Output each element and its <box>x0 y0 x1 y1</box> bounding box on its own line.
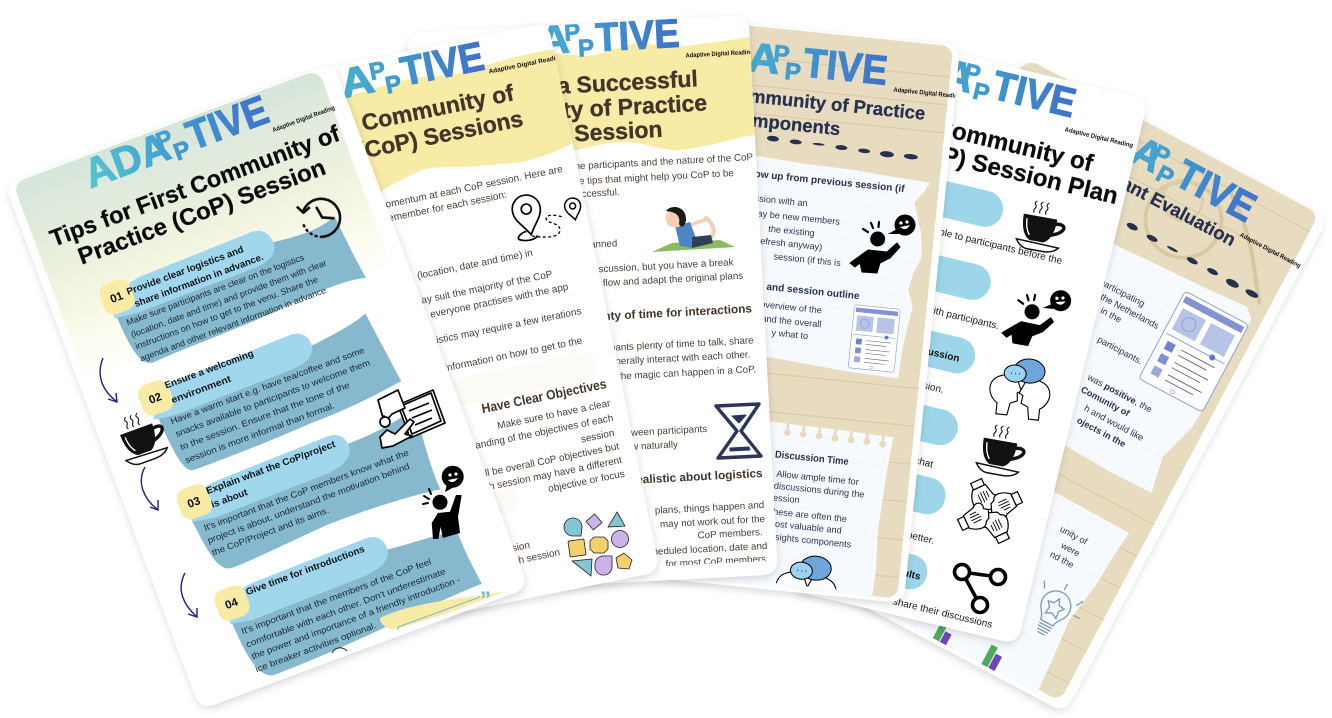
card 3 intro text: some tips that might help you CoP to be <box>560 168 735 188</box>
card 2 objectives text: session <box>496 540 531 558</box>
card 5: session plan <box>796 60 1147 647</box>
step 3 text: discussion. <box>894 374 945 396</box>
tip 2 <box>135 301 405 479</box>
card 3 text: logistics: scheduled location, date and <box>643 541 768 558</box>
tip 3: project is about, understand the motivation behind <box>206 461 411 545</box>
card 4 logo: TIVE <box>801 39 890 94</box>
icon: discussion heads <box>773 552 839 618</box>
card 5 tagline: Adaptive Digital Reading <box>1064 126 1134 149</box>
tip 3: the CoP/Project and its aims. <box>210 505 330 558</box>
card 2 logistics text <box>407 240 588 378</box>
card 3 title: Community of Practice <box>456 89 708 128</box>
card 2 yellow banner <box>326 49 577 212</box>
step pill 4 <box>920 405 958 446</box>
icon: coffee <box>112 407 171 468</box>
card 6 chart bars <box>932 626 1002 671</box>
card 1 logo: P <box>152 125 177 156</box>
tip 4: Give time for introductions <box>244 544 366 598</box>
card 2 title <box>349 79 525 164</box>
card 3: successful community of practice session <box>407 6 781 592</box>
card 1 logo: TIVE <box>180 86 275 159</box>
card 6 tagline: Adaptive Digital Reading <box>1238 232 1302 270</box>
tip 1: 01 <box>109 290 125 306</box>
card 4 title: Community of Practice <box>724 83 926 124</box>
card 2 logistics text: information on how to get to the <box>444 335 584 374</box>
tip 4: ice breaker activities optional. <box>254 620 377 674</box>
card 3 text: planned: flow and adapt the original plans <box>603 271 744 289</box>
tip 2: session is more informal than formal. <box>184 400 336 465</box>
card 2 logistics text: logistics may require a few iterations <box>422 306 582 349</box>
tip 1 <box>96 198 368 372</box>
card 4 section: follow up: may be new members <box>749 208 841 227</box>
card 1 tagline: Adaptive Digital Reading <box>272 104 336 134</box>
card 4 binder holes <box>783 422 887 448</box>
tip 3 <box>174 404 444 578</box>
step 4 text: chat <box>913 455 934 471</box>
tip 3: is about <box>210 487 250 511</box>
card 3 logo: TIVE <box>594 10 681 60</box>
card 4 section: follow up: the existing <box>768 224 815 238</box>
step 5 text: better. <box>906 530 935 547</box>
card 2 objectives text: will be overall CoP objectives but <box>474 441 620 481</box>
icon: clock <box>297 193 345 242</box>
card 4 section: follow up: session (if this is <box>773 251 842 268</box>
card 3 intro text <box>559 152 755 201</box>
card 1 title: Tips for First Community of <box>46 120 343 252</box>
card 6 torn note 1 <box>1065 244 1252 493</box>
card 3 tagline: Adaptive Digital Reading <box>685 49 754 59</box>
card 1 logo: P <box>170 136 195 167</box>
card 4 section: session outline <box>764 284 860 339</box>
card 5 logo: P <box>961 59 983 89</box>
curved arrow 2 <box>141 467 158 510</box>
card 6 text 2: was positive, the <box>1085 372 1154 414</box>
tip 4: 04 <box>224 596 240 612</box>
card 1 logo <box>78 86 275 198</box>
card 4 torn note 2 <box>699 422 894 596</box>
card 6 text 2: Comunity of <box>1079 384 1132 419</box>
card 3 intro text: the participants and the nature of the CoP <box>572 152 754 173</box>
card 3 text: interactions: generally interact with each other. <box>604 349 751 368</box>
card 5 logo: P <box>970 78 992 108</box>
icon: heads <box>987 355 1053 421</box>
tip 4: comfortable with each other. Don't underestimate <box>245 566 447 649</box>
card 4 section: discussion time: most valuable and <box>767 518 842 536</box>
card 1: tips for first community of practice session <box>5 63 528 710</box>
card 6 title: Participant Evaluation <box>1058 140 1240 250</box>
card 3 heading: interactions: Plenty of time for interactions <box>585 301 753 324</box>
card 4 section: session outline: and session outline <box>766 282 860 302</box>
icon: share nodes <box>954 564 1006 612</box>
card 6 text 2: h and would like <box>1083 403 1145 443</box>
card 5 title: (CoP) Session Plan <box>900 132 1121 210</box>
card 4 section: session outline: overview of the <box>760 299 822 315</box>
card 2 title: (CoP) Sessions <box>355 105 525 164</box>
tip 4: the power and importance of a friendly introduction - <box>250 574 462 661</box>
curved arrow 1 <box>100 358 117 402</box>
step pill 1 <box>942 181 1004 227</box>
card 2 objectives text: session <box>580 428 615 446</box>
card 2 objectives text: understanding of the objectives of each <box>442 413 614 458</box>
card 3 title: a Successful <box>557 65 698 99</box>
card 3 logo: P <box>564 19 581 47</box>
card 5 logo: TIVE <box>988 62 1080 126</box>
card 4 paper background <box>748 26 952 598</box>
card 2 objectives text: each session <box>502 547 561 570</box>
icon: tablet <box>848 305 900 372</box>
step pill 3: Discussion <box>906 342 961 365</box>
tip 2: to the session. Ensure that the tone of the <box>179 380 351 452</box>
card 2 objectives text: objective or focus <box>547 469 626 495</box>
card 4 section: follow up: session with an <box>745 192 808 208</box>
card 2 tagline: Adaptive Digital Reading <box>488 54 564 76</box>
card 6 logo <box>1132 140 1258 223</box>
card 3 intro text: successful. <box>571 187 620 201</box>
step pill 6: Results <box>884 564 922 583</box>
card 4 tagline: Adaptive Digital Reading <box>893 87 962 100</box>
card 3 text: logistics: for most CoP members <box>665 554 766 570</box>
card 6 paper background <box>1020 62 1316 698</box>
card 6 text 3: were <box>1059 540 1082 559</box>
card 2 logistics text: (location, date and time) in <box>416 248 534 282</box>
card 3 text: planned: planned <box>582 238 618 251</box>
tip 1: share information in advance. <box>133 252 265 310</box>
card 3 text: logistics: may not work out for the <box>660 514 766 530</box>
card 2 title: Community of <box>359 79 516 136</box>
card 4 section: discussion time: session <box>768 492 800 505</box>
card 3 text: interactions <box>584 335 760 455</box>
step pill 2 <box>935 255 991 300</box>
card 4 dashed trail <box>766 135 918 160</box>
tip 1: agenda and other relevant information in advance <box>138 285 327 364</box>
tip 4: It's important that the members of the CoP feel <box>240 556 433 636</box>
icon: coloured shapes <box>564 512 632 576</box>
card 3 text: interactions: participants plenty of time to talk, share <box>584 335 754 355</box>
card 3 logo <box>538 10 681 65</box>
card 3 heading: logistics: Be realistic about logistics <box>613 466 763 488</box>
step 6 text: share their discussions <box>892 596 993 631</box>
card 1 logo: ADA <box>78 123 176 197</box>
card 4 section: discussion time: These are often the <box>767 506 847 524</box>
card 4 logo <box>751 43 888 86</box>
tip 2: environment <box>170 374 234 406</box>
card 2 heading: objectives: Have Clear Objectives <box>480 376 608 416</box>
icon: yoga figure <box>652 207 735 252</box>
card 6 text 3: unity of <box>1058 524 1090 547</box>
card 6: participant evaluation <box>849 62 1324 713</box>
card 3 text: logistics <box>432 499 778 592</box>
card 2: community of practice sessions <box>320 17 661 618</box>
card 3 text: logistics: CoP members. <box>697 527 763 541</box>
card 4 logo: P <box>783 58 802 87</box>
card 2 logo: A <box>336 55 378 107</box>
card 4 section: discussion time: Allow ample time for <box>776 469 859 487</box>
tip 2: snacks available to participants to welcome them <box>174 357 371 439</box>
quote decoration <box>332 587 503 653</box>
card 2 logistics text: everyone practises with the app <box>429 282 570 321</box>
card 2 logo: TIVE <box>396 33 488 95</box>
tip 2: Ensure a welcoming <box>163 348 255 391</box>
card 2 logo <box>336 33 488 109</box>
card 2 faint panels <box>426 351 621 524</box>
card 4 logo: P <box>772 40 791 69</box>
card 4 section: session outline: and the overall <box>761 313 822 329</box>
card 3 text: interactions: flow naturally <box>621 439 678 453</box>
card 2 logistics text: may suit the majority of the CoP <box>412 269 554 308</box>
card 4 title <box>752 92 925 136</box>
card 4 section: follow up <box>756 172 905 266</box>
card 4 title: Components <box>727 107 841 139</box>
card 4 torn note 1 <box>756 156 930 378</box>
card 6 logo: TIVE <box>1168 151 1264 231</box>
card 2 intro text: momentum at each CoP session. Here are <box>377 164 564 212</box>
tip 3: It's important that the CoP members know what the <box>202 447 410 533</box>
step 2 text: with participants. <box>924 304 1000 332</box>
card 6 dashed trail <box>1124 221 1261 300</box>
card 4 section: discussion time: Discussion Time <box>774 449 850 468</box>
card 6 text 2 <box>1077 374 1152 447</box>
card 6 text 3: nd the <box>1048 549 1076 570</box>
tip 2: 02 <box>147 391 164 407</box>
step pill 5 <box>913 474 946 514</box>
card 2 logo: P <box>367 57 388 86</box>
icon: coffee 1 <box>1015 198 1068 254</box>
card 3 title <box>455 65 709 152</box>
step pill 6 <box>905 554 928 590</box>
icon: hourglass <box>716 404 761 458</box>
card 6 text 1 <box>1096 281 1158 364</box>
card 3 text: logistics: plans, things happen and <box>655 500 765 517</box>
card 4 section: discussion time: insights components <box>767 531 852 550</box>
card 3 text: interactions: the magic can happen in a CoP. <box>618 364 756 382</box>
card 6 text 1: the Netherlands <box>1099 292 1161 331</box>
step pill 3 <box>928 330 976 374</box>
card 1 title: Practice (CoP) Session <box>74 154 329 269</box>
icon: person 1 <box>1001 285 1072 350</box>
curved arrow 3 <box>181 573 197 617</box>
card 4 section: follow up: Follow up from previous session (if <box>736 167 906 195</box>
icon: coffee 2 <box>975 422 1028 478</box>
card 1 gradient header <box>13 70 399 399</box>
card 3 logo: P <box>577 35 595 63</box>
card 3 title: Session <box>574 116 663 146</box>
card 4 section: session outline: y what to <box>771 327 809 341</box>
icon: presentation <box>378 390 445 448</box>
card 3 logo: A <box>538 16 571 63</box>
tip 3: Explain what the CoP/project <box>205 439 338 497</box>
card 5 title: Community of <box>932 113 1097 178</box>
card 3 text: planned: discussion, but you have a break <box>591 257 734 276</box>
card 4 section: discussion time: discussions during the <box>773 481 865 500</box>
card 6 logo: ADA <box>1072 100 1171 181</box>
card 6 text 1: participants. <box>1096 334 1144 366</box>
icon: person <box>850 214 916 273</box>
card 3 yellow banner <box>408 37 756 183</box>
card 4 section: follow up: refresh anyway) <box>757 236 823 252</box>
card 2 objectives text: each session may have a different <box>472 455 623 496</box>
card 6 logo: P <box>1148 140 1175 171</box>
card 5 logo: ADA <box>882 36 978 102</box>
tip 1: Provide clear logistics and <box>125 244 245 298</box>
tip 3: 03 <box>186 495 202 511</box>
tip 4 <box>211 504 486 686</box>
step 1 text: available to participants before the <box>912 221 1064 267</box>
icon: map pins <box>510 193 583 242</box>
card 2 logo: P <box>383 70 404 100</box>
card 6 logo: P <box>1151 160 1178 192</box>
card 2 intro text: remember for each session: <box>384 190 508 225</box>
quote decoration: ” <box>480 587 491 612</box>
card 6 text 1: in the <box>1099 305 1123 325</box>
icon: cheering person <box>423 466 464 539</box>
card 5 logo <box>956 60 1077 118</box>
card 6 text 3 <box>1050 527 1088 568</box>
card 3 text: planned <box>582 232 744 290</box>
card 4 section: discussion time <box>764 449 868 550</box>
card 4 logo: A <box>746 34 782 83</box>
card 2 objectives text: Make sure to have a clear <box>496 398 612 432</box>
card 3 text: interactions: between participants <box>617 424 708 440</box>
tip 1: Make sure participants are clear on the logistics <box>125 252 306 327</box>
card 6 text 1: participating <box>1098 277 1147 309</box>
icon: joined hands <box>955 476 1025 546</box>
tip 1: (location, date and time) and provide them with clear <box>129 258 328 340</box>
card 5 title <box>948 123 1117 204</box>
card 4: community of practice components <box>641 20 966 626</box>
icon: light bulb <box>1022 574 1091 646</box>
card 6 text 2: ojects in the <box>1075 415 1127 449</box>
card 2 objectives text <box>439 398 639 577</box>
tip 2: Have a warm start e.g. have tea/coffee and some <box>169 345 366 426</box>
tip 1: instructions on how to get to the venu. Share the <box>134 274 319 351</box>
card 6 torn note 2 <box>900 492 1129 693</box>
icon: tablet <box>1139 291 1249 412</box>
